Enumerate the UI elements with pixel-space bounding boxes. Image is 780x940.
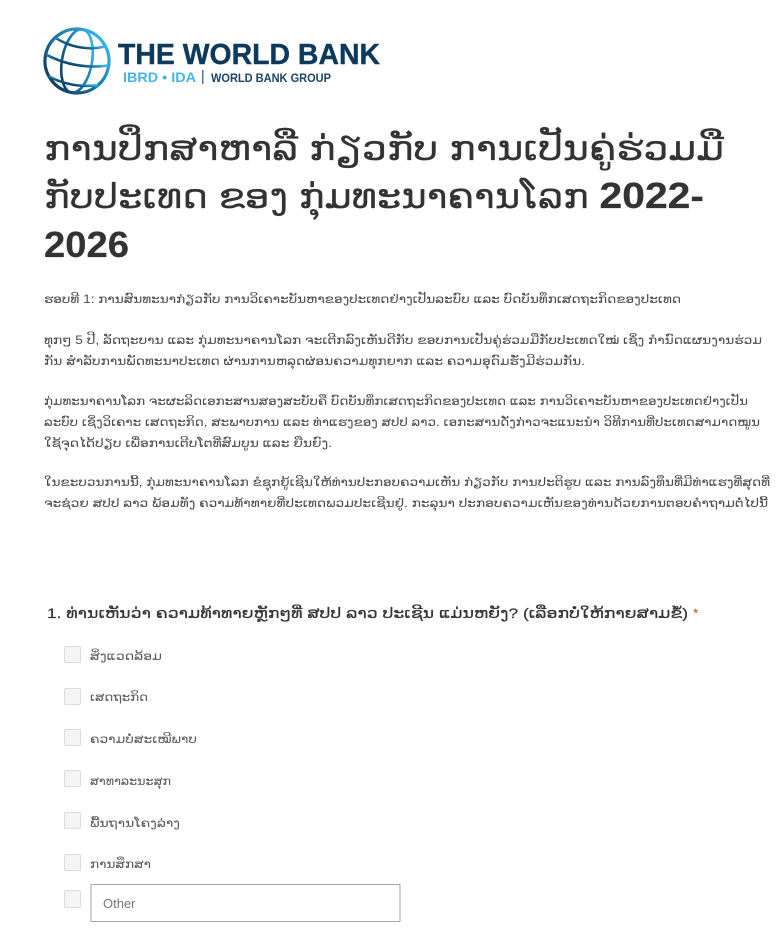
logo subline: World Bank Group: WORLD BANK GROUP [211, 73, 331, 85]
option: inequality [64, 730, 197, 746]
option: economy: ເສດຖະກິດ [90, 689, 148, 704]
text block: paragraph 3: ຈະຊ່ວຍ ສປປ ລາວ ພ້ອມທັງ ຄວາມທ້າທາຍທີ່ປະເທດພວມປະເຊີນຢູ່. ກະລຸນາ ປະກອບຄວາມເຫັນຂອງທ່ານດ້ວຍການຕອບຄໍາຖາມຕໍ່ໄປນີ້ [44, 495, 768, 512]
option: education: ການສຶກສາ [90, 856, 151, 871]
title: 2026 [44, 224, 129, 265]
option: public health: ສາທາລະນະສຸກ [90, 776, 171, 790]
text block: paragraph 2 [44, 393, 760, 452]
option: public health [64, 770, 171, 790]
text block: paragraph 3: ໃນຂະບວນການນີ້, ກຸ່ມທະນາຄານໂລກ ຂໍຊຸກຍູ້ເຊີນໃຫ້ທ່ານປະກອບຄວາມເຫັນ ກ່ຽວກັບ ການປະຕິຮູບ ແລະ ການລົງທຶນທີ່ມີທ່າແຮງທີ່ສຸດທີ່ [44, 474, 770, 492]
text block: paragraph 1: ທຸກໆ 5 ປີ, ລັດຖະບານ ແລະ ກຸ່ມທະນາຄານໂລກ ຈະເຕີກລົງເຫັນດີກັບ ຂອບການເປັນຄູ່ຮ່ວມມືກັບປະເທດໃໝ່ ເຊິ່ງ ກໍານົດແຜນງານຮ່ວມ [44, 331, 762, 349]
logo: The World Bank [40, 24, 380, 98]
text block: round heading: ຮອບທີ 1: ການສົນທະນາກ່ຽວກັບ ການວິເຄາະບັນຫາຂອງປະເທດຢ່າງເປັນລະບົບ ແລະ ບົດບັນທຶກເສດຖະກິດຂອງປະເທດ [44, 291, 681, 306]
option: economy [64, 688, 148, 704]
option: education [64, 854, 151, 871]
option: other [64, 884, 400, 922]
option: infrastructure: ພື້ນຖານໂຄງລ່າງ [90, 815, 180, 830]
text block: paragraph 1: ກັນ ສໍາລັບການພັດທະນາປະເທດ ຜ່ານການຫລຸດຜ່ອນຄວາມທຸກຍາກ ແລະ ຄວາມອຸດົມຮັ່ງມີຮ່ວມກັນ. [44, 353, 585, 370]
text block: paragraph 2: ກຸ່ມທະນາຄານໂລກ ຈະຜະລິດເອກະສານສອງສະບັບຄື ບົດບັນທຶກເສດຖະກິດຂອງປະເທດ ແລະ ການວິເຄາະບັນຫາຂອງປະເທດຢ່າງເປັນ [44, 393, 748, 410]
logo subline: IBRD IDA: IBRD • IDA [123, 69, 196, 85]
text block: paragraph 2: ໃຊ້ຈຸດໄດ້ປຽບ ເພື່ອການເຕີບໂຕທີ່ສົມບູນ ແລະ ຍືນຍົງ. [44, 435, 332, 452]
question 1: * [693, 605, 699, 621]
text block: paragraph 2: ລະບົບ ເຊິ່ງວິເຄາະ ເສດຖະກິດ, ສະພາບການ ແລະ ທ່າແຮງຂອງ ສປປ ລາວ. ເອກະສານດັ່ງກ່າວຈະແນະນໍາ ວິທີການທີ່ປະເທດສາມາດໝູນ [44, 414, 760, 430]
logo wordmark: THE WORLD BANK [118, 39, 380, 71]
option: environment: ສິ່ງແວດລ້ອມ [90, 648, 162, 663]
option: other: Other [103, 896, 136, 911]
text block: paragraph 3 [44, 474, 770, 512]
option: environment [64, 646, 162, 663]
text block: paragraph 1 [44, 331, 762, 370]
option: inequality: ຄວາມບໍ່ສະເໝີພາບ [90, 731, 197, 746]
logo divider [202, 70, 204, 84]
title: ການປຶກສາຫາລື ກ່ຽວກັບ ການເປັນຄູ່ຮ່ວມມື [44, 124, 724, 170]
title [44, 124, 724, 265]
question 1 [47, 604, 699, 622]
option: infrastructure [64, 812, 180, 830]
title: ກັບປະເທດ ຂອງ ກຸ່ມທະນາຄານໂລກ 2022- [44, 175, 704, 220]
question 1: 1. ທ່ານເຫັນວ່າ ຄວາມທ້າທາຍຫຼັກໆທີ່ ສປປ ລາວ ປະເຊີນ ແມ່ນຫຍັງ? (ເລືອກບໍ່ໃຫ້ກາຍສາມຂໍ້) [47, 604, 688, 622]
icon: globe [40, 24, 114, 98]
